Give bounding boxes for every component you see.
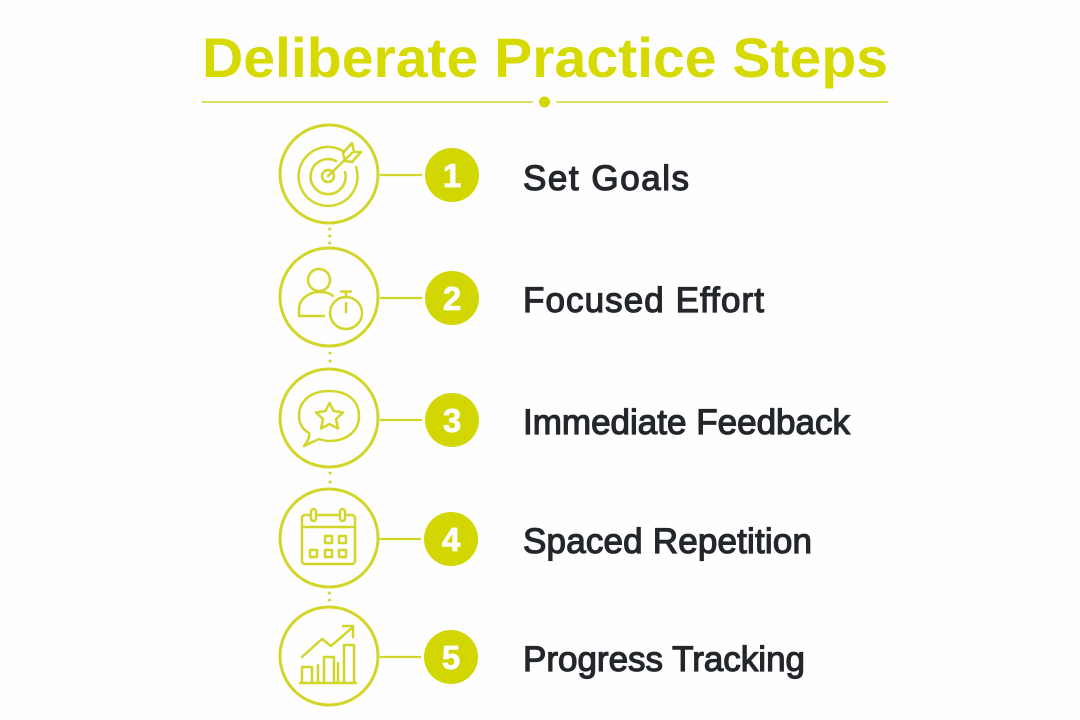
title: Deliberate Practice Steps <box>202 26 888 89</box>
label: Progress Tracking <box>523 640 805 679</box>
step 1: set goals <box>280 125 689 223</box>
step 3: immediate feedback <box>280 369 850 467</box>
step 5: progress tracking <box>280 607 805 705</box>
number badge 1 <box>425 148 479 202</box>
icon: person with stopwatch <box>280 248 378 346</box>
connector line <box>380 419 422 421</box>
number badge 3: 3 <box>443 402 461 439</box>
number badge 3 <box>425 393 479 447</box>
step 2: focused effort <box>280 248 764 346</box>
number badge 1: 1 <box>443 157 461 194</box>
icon: target with arrow <box>280 125 378 223</box>
dotted connectors between steps <box>328 228 332 602</box>
connector line <box>380 656 421 658</box>
label: Focused Effort <box>523 281 764 320</box>
number badge 4: 4 <box>442 521 461 558</box>
step 4: spaced repetition <box>280 489 812 587</box>
label: Immediate Feedback <box>523 403 850 442</box>
label: Set Goals <box>523 159 689 198</box>
icon: calendar <box>280 489 378 587</box>
number badge 2 <box>425 271 479 325</box>
connector line <box>380 174 422 176</box>
icon: speech bubble with star <box>280 369 378 467</box>
label: Spaced Repetition <box>523 522 812 561</box>
icon: bar chart with rising arrow <box>280 607 378 705</box>
connector line <box>379 538 421 540</box>
connector line <box>380 297 422 299</box>
number badge 2: 2 <box>443 280 461 317</box>
number badge 5: 5 <box>442 639 460 676</box>
title divider <box>202 96 888 108</box>
number badge 5 <box>424 630 478 684</box>
number badge 4 <box>424 512 478 566</box>
